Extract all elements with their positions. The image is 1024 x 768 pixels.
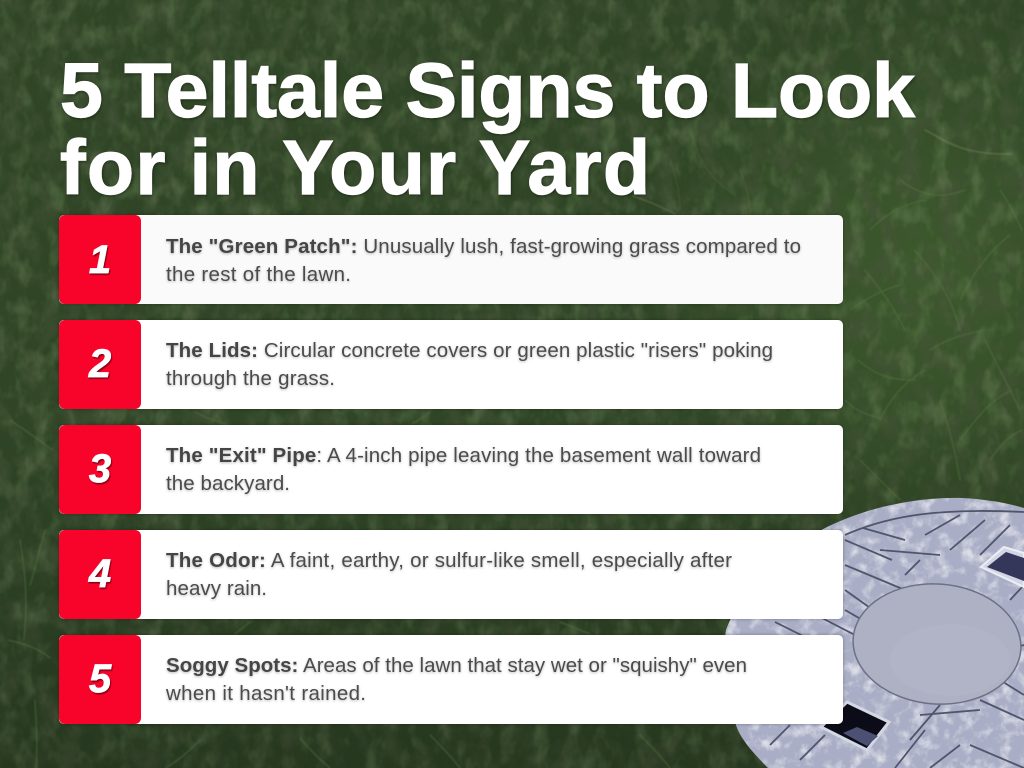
number badge 5: 5 <box>89 657 112 701</box>
sign 2: lids <box>59 320 843 409</box>
text: green patch <box>166 235 801 286</box>
number badge 4: 4 <box>88 552 111 596</box>
text: green patch: The "Green Patch": Unusually lush, fast-growing grass compared to <box>166 235 801 258</box>
access slot top right <box>981 547 1024 587</box>
text: soggy spots: Soggy Spots: Areas of the lawn that stay wet or "squishy" even <box>166 654 747 677</box>
number badge 1: 1 <box>89 238 111 282</box>
access slot bottom left <box>821 702 889 750</box>
number badge 2 <box>59 320 141 409</box>
title <box>60 48 915 211</box>
text: exit pipe <box>166 444 761 495</box>
septic tank lid photo <box>725 498 1024 768</box>
text: exit pipe: the backyard. <box>166 472 290 495</box>
number badge 4 <box>59 530 141 619</box>
sign 1: green patch <box>59 215 843 304</box>
text: lids: through the grass. <box>166 367 335 390</box>
number badge 3: 3 <box>89 447 111 491</box>
lid rim and moulded grooves <box>770 511 1024 768</box>
text: odor <box>166 549 732 600</box>
number badge 5 <box>59 635 141 724</box>
number badge 1 <box>59 215 141 304</box>
text: odor: heavy rain. <box>166 577 267 600</box>
sign 4: odor <box>59 530 843 619</box>
text: soggy spots: when it hasn't rained. <box>165 682 366 705</box>
text: lids: The Lids: Circular concrete covers or green plastic "risers" poking <box>166 339 773 362</box>
sign 3: exit pipe <box>59 425 843 514</box>
sign 5: soggy spots <box>59 635 843 724</box>
text: green patch: the rest of the lawn. <box>166 263 351 286</box>
text: odor: The Odor: A faint, earthy, or sulfur-like smell, especially after <box>166 549 732 572</box>
title: for in Your Yard <box>60 125 650 211</box>
text: lids <box>166 339 773 390</box>
text: soggy spots <box>165 654 747 705</box>
centre plug <box>849 578 1024 710</box>
text: exit pipe: The "Exit" Pipe: A 4-inch pipe leaving the basement wall toward <box>166 444 761 467</box>
title: 5 Telltale Signs to Look <box>60 48 915 134</box>
number badge 2: 2 <box>88 342 111 386</box>
number badge 3 <box>59 425 141 514</box>
